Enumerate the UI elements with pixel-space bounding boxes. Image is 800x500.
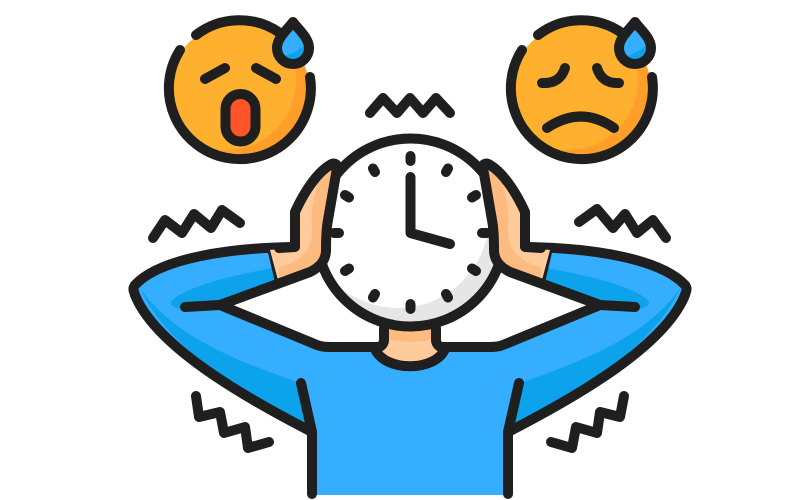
- clock hands: [410, 177, 450, 244]
- left arm and torso: [133, 247, 411, 495]
- shake mark: bottom left: [196, 396, 269, 448]
- shake mark: bottom right: [551, 396, 624, 448]
- emoji: yawning face: [156, 10, 312, 164]
- shake mark: top center: [370, 98, 450, 113]
- right hand: [480, 160, 600, 305]
- clock tick marks: [334, 156, 487, 309]
- left hand: [220, 160, 340, 305]
- emoji: sad face: [498, 10, 654, 164]
- sad mouth: [547, 116, 614, 128]
- neck: [375, 325, 445, 367]
- icon: sweat drop: [612, 22, 654, 70]
- person: body and arms: [133, 247, 687, 495]
- icon: sweat drop: [270, 22, 312, 70]
- open mouth: [226, 94, 256, 142]
- right arm and torso: [409, 247, 687, 495]
- shake mark: left: [153, 210, 240, 238]
- clock: [307, 126, 504, 326]
- shake mark: right: [579, 209, 666, 238]
